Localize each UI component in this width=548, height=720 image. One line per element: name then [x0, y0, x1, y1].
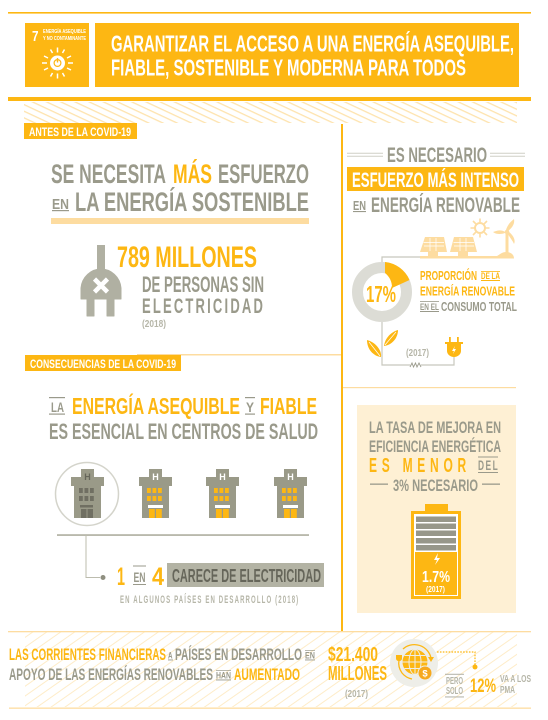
section label: antes de la covid-19: ANTES DE LA COVID-19 — [29, 125, 131, 139]
icon: orange plug — [445, 337, 463, 357]
wiring — [382, 257, 454, 365]
heading: es necesario esfuerzo más intenso: ES NECESARIO — [387, 144, 487, 167]
icon: globe with coin — [390, 639, 438, 687]
section label: consecuencias de la covid-19: CONSECUENCIAS DE LA COVID-19 — [30, 357, 176, 371]
heading: es necesario esfuerzo más intenso: EN — [353, 198, 366, 213]
icon: SDG 7 badge: Y NO CONTAMINANTE — [43, 36, 87, 42]
stat: 1 en 4 carece de electricidad: 4 — [152, 563, 164, 591]
icon: hospital without electricity: H — [84, 472, 91, 482]
heading: es necesario esfuerzo más intenso — [347, 144, 525, 217]
panel: corrientes financieras: APOYO DE LAS ENERGÍAS RENOVABLES — [9, 665, 213, 684]
icon: battery 1.7%: 1.7% — [422, 569, 450, 586]
panel: eficiencia energética: DEL — [478, 459, 498, 474]
stat: 789 millones: (2018) — [142, 319, 166, 330]
section rule — [137, 354, 341, 356]
stat: pero solo 12% va a los PMA: SOLO — [446, 686, 463, 697]
icon: battery 1.7% — [411, 504, 461, 599]
panel: corrientes financieras: AUMENTADO — [234, 666, 300, 684]
icon: hospital with electricity 1 — [139, 469, 172, 518]
text: proporción de la energía renovable: DE LA — [481, 271, 500, 281]
icon: resistor zigzag — [410, 363, 421, 367]
stat: $21.400 millones: $21.400 — [328, 644, 378, 666]
icon: hospital without electricity — [56, 462, 118, 526]
year label: (2017) — [406, 348, 429, 359]
heading: se necesita más esfuerzo: EN — [52, 196, 69, 213]
stat: pero solo 12% va a los PMA — [445, 674, 531, 697]
panel: corrientes financieras: LAS CORRIENTES FINANCIERAS — [9, 646, 166, 664]
vertical divider — [341, 124, 343, 631]
top rule — [8, 12, 531, 14]
panel: corrientes financieras: HAN — [216, 670, 231, 680]
stat: 1 en 4 carece de electricidad: EN — [134, 569, 146, 585]
heading: se necesita más esfuerzo: SE NECESITA — [51, 159, 166, 189]
icon: hospital with electricity 2 — [206, 469, 239, 518]
header rule — [8, 97, 531, 101]
stat: $21.400 millones — [328, 644, 387, 700]
donut chart: 17% — [358, 262, 410, 316]
icon: globe with coin: $ — [422, 668, 428, 680]
panel: corrientes financieras: EN — [305, 650, 315, 660]
stat: $21.400 millones: (2017) — [345, 689, 368, 700]
icon: hospital with electricity 2: H — [219, 472, 226, 482]
text: proporción de la energía renovable — [420, 268, 517, 314]
heading: se necesita más esfuerzo: ESFUERZO — [218, 159, 309, 189]
stat: 789 millones: ELECTRICIDAD — [142, 294, 263, 318]
section label: consecuencias de la covid-19 — [25, 355, 181, 371]
right panel rule — [343, 387, 516, 388]
stat: pero solo 12% va a los PMA: PERO — [446, 676, 463, 687]
panel: corrientes financieras: PAÍSES EN DESARROLLO — [175, 645, 302, 664]
stat: 1 en 4 carece de electricidad: 1 — [117, 563, 125, 591]
panel: eficiencia energética — [357, 405, 516, 613]
stat: 1 en 4 carece de electricidad — [117, 563, 324, 605]
icon: hospital with electricity 1: H — [152, 472, 159, 482]
donut chart: 17%: 17% — [366, 281, 396, 307]
text: proporción de la energía renovable: PROPORCIÓN — [420, 268, 477, 283]
icon: SDG 7 badge: ENERGÍA ASEQUIBLE — [43, 27, 87, 35]
heading: energía asequible y fiable: ENERGÍA ASEQUIBLE — [72, 392, 240, 419]
heading: se necesita más esfuerzo: MÁS — [173, 158, 212, 189]
heading: energía asequible y fiable: ES ESENCIAL EN CENTROS DE SALUD — [49, 419, 318, 444]
icon: battery 1.7%: (2017) — [426, 585, 445, 594]
heading: energía asequible y fiable — [49, 392, 318, 444]
section label: antes de la covid-19 — [24, 123, 137, 139]
title banner — [95, 23, 519, 87]
heading: energía asequible y fiable: LA — [51, 399, 64, 415]
icon: SDG 7 badge — [25, 23, 89, 87]
stat: $21.400 millones: MILLONES — [328, 663, 387, 685]
stat: 1 en 4 carece de electricidad: EN ALGUNOS PAÍSES EN DESARROLLO (2018) — [120, 593, 298, 605]
panel: corrientes financieras: A — [168, 650, 173, 660]
icon: SDG 7 badge: 7 — [32, 28, 38, 45]
icon: unplugged plug — [81, 245, 121, 316]
connector line — [57, 534, 309, 580]
stat: pero solo 12% va a los PMA: PMA — [500, 685, 515, 696]
text: proporción de la energía renovable: EN EL — [420, 302, 439, 312]
heading: se necesita más esfuerzo: LA ENERGÍA SOSTENIBLE — [75, 186, 309, 217]
stat: 789 millones: DE PERSONAS SIN — [142, 272, 264, 297]
icon: hospital with electricity 3: H — [287, 472, 294, 482]
panel: eficiencia energética: 3% NECESARIO — [393, 477, 478, 495]
stat: 789 millones: 789 MILLONES — [117, 241, 257, 274]
panel: eficiencia energética: ES MENOR — [369, 455, 466, 477]
heading: se necesita más esfuerzo — [51, 158, 309, 224]
stat: 1 en 4 carece de electricidad: CARECE DE ELECTRICIDAD — [172, 566, 321, 586]
stat: 789 millones — [117, 241, 264, 330]
icon: hospital with electricity 3 — [274, 469, 307, 518]
stat: pero solo 12% va a los PMA: VA A LOS — [500, 674, 531, 685]
stat: pero solo 12% va a los PMA: 12% — [470, 676, 496, 697]
icon: leaves — [367, 330, 398, 357]
panel: corrientes financieras — [8, 631, 531, 709]
icon: solar panels, sun and wind turbine — [420, 218, 515, 258]
dotted arrow — [437, 652, 478, 670]
heading: energía asequible y fiable: Y — [246, 399, 255, 415]
heading: energía asequible y fiable: FIABLE — [260, 393, 317, 419]
